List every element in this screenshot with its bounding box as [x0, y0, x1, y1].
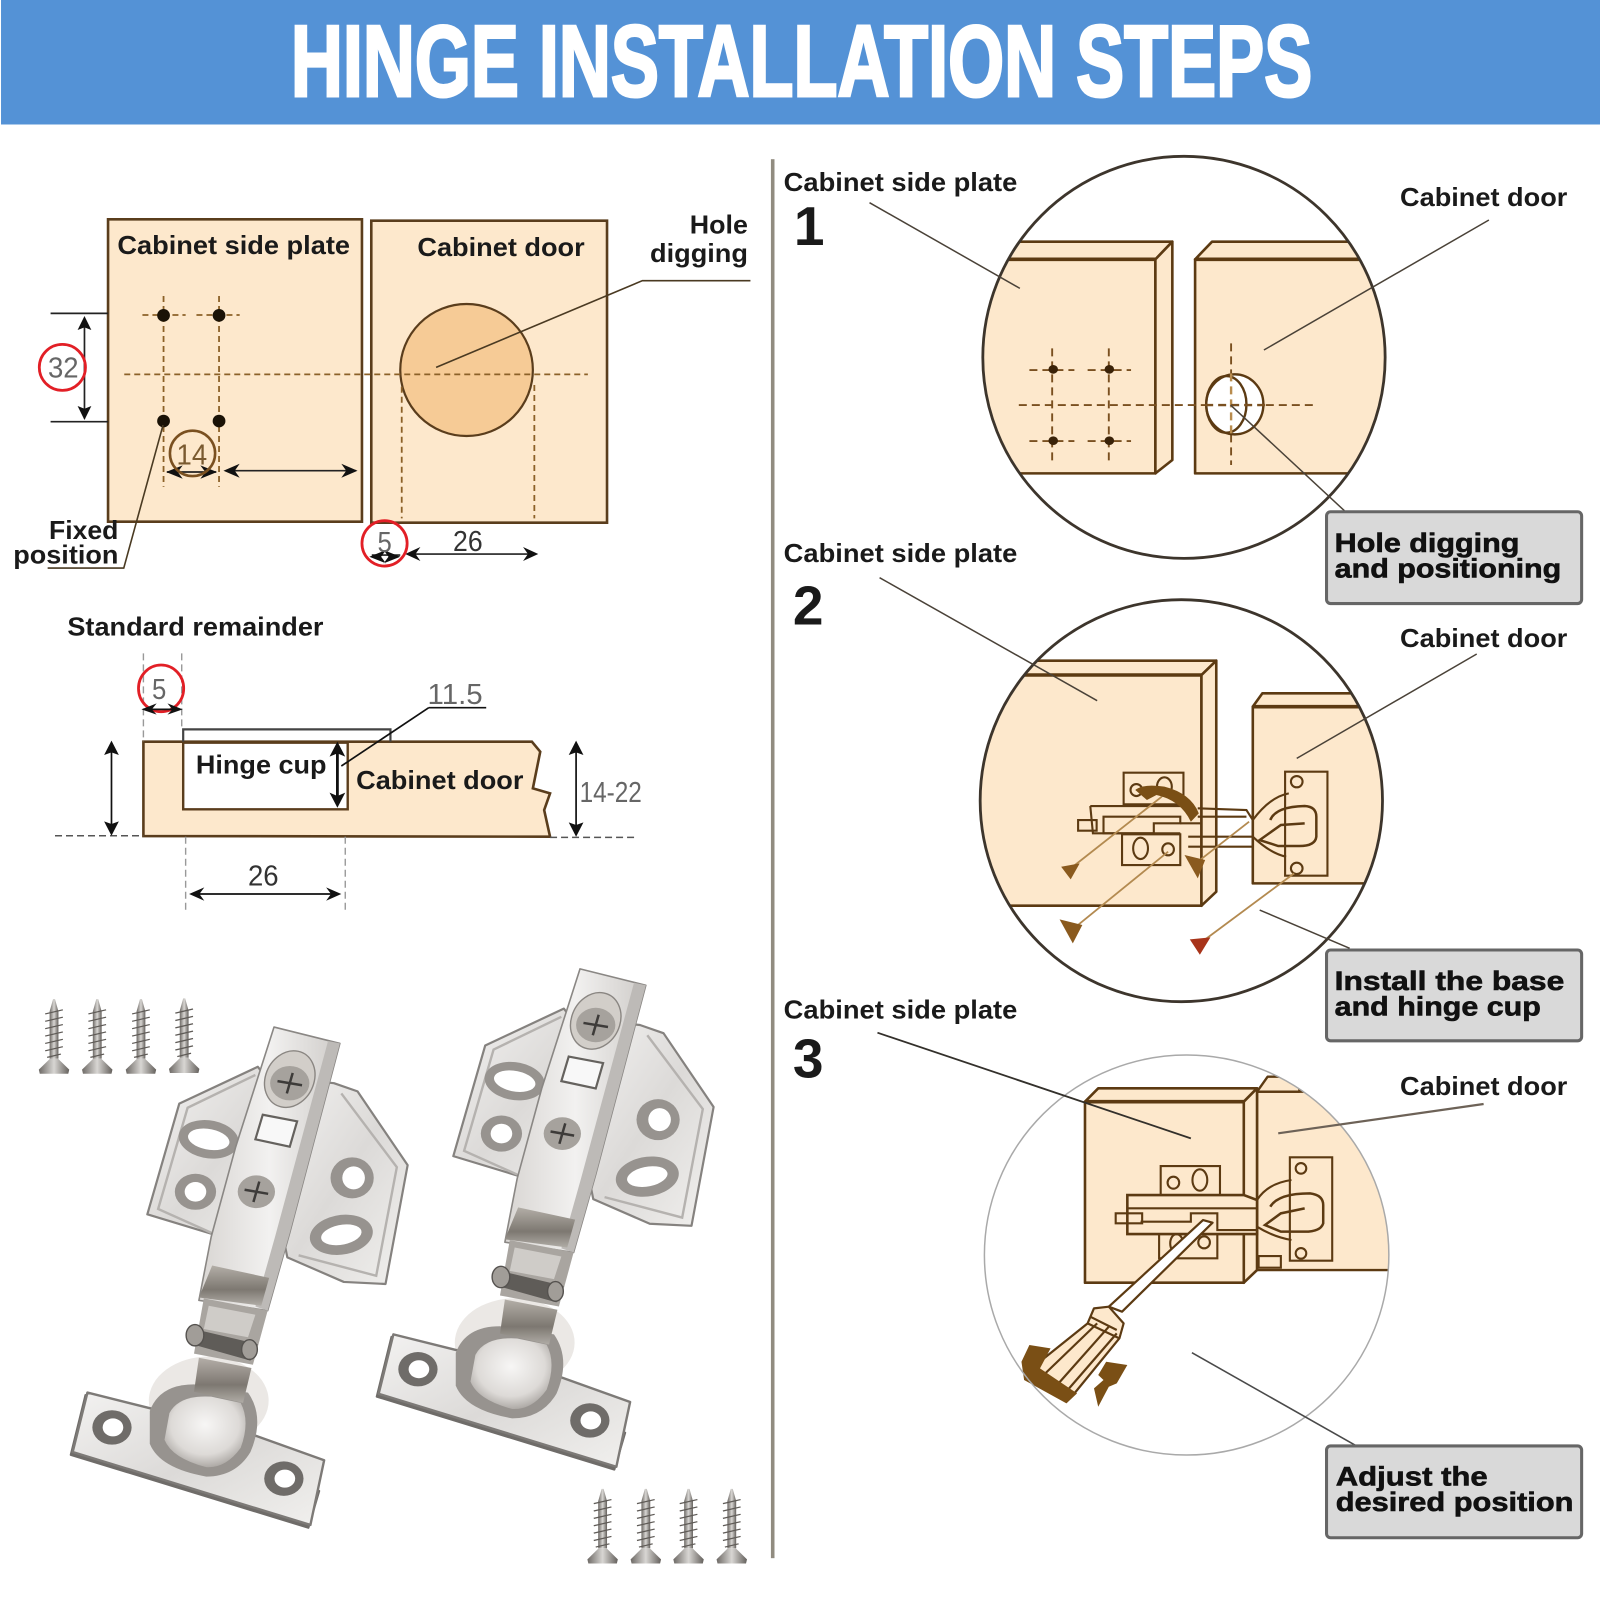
leader lines	[877, 1033, 1484, 1445]
knuckle	[186, 1298, 268, 1365]
cup	[150, 1384, 257, 1477]
step 3 illustration	[1085, 1077, 1405, 1283]
base holes	[92, 1410, 304, 1496]
label: cabinet side plate: Cabinet side plate	[784, 538, 1017, 568]
top screw	[258, 1046, 322, 1112]
cup disc	[149, 1357, 269, 1445]
door hole	[1205, 373, 1265, 435]
step 2 illustration	[971, 661, 1405, 906]
callout: adjust the desired position: Adjust the	[1336, 1462, 1488, 1492]
callout: install the base and hinge cup: and hinge cup	[1335, 991, 1541, 1021]
label: fixed position: Fixed	[49, 515, 118, 545]
label: hole digging: Hole	[690, 210, 748, 240]
circle outline	[984, 1055, 1389, 1455]
label: cabinet door: Cabinet door	[356, 765, 523, 795]
step 1 illustration	[971, 242, 1405, 473]
cabinet side plate board	[108, 219, 362, 522]
brown motion arrows	[1021, 1345, 1127, 1407]
step number 3: 3	[793, 1028, 823, 1090]
hinge drawing	[1116, 1157, 1332, 1268]
red circle 32	[39, 344, 85, 390]
label: hole digging	[650, 210, 748, 268]
dimensions	[152, 674, 642, 893]
dimensions: 5	[378, 527, 392, 559]
arm screw	[238, 1175, 275, 1208]
circle outline	[980, 600, 1383, 1002]
wing holes	[174, 1115, 378, 1260]
label: cabinet side plate: Cabinet side plate	[784, 994, 1017, 1024]
red circle 5	[138, 665, 184, 712]
panel: step 2	[784, 538, 1582, 1041]
circle 14	[170, 431, 215, 476]
label: standard remainder: Standard remainder	[67, 612, 323, 642]
callout: hole digging and positioning: Hole digging	[1335, 528, 1519, 558]
dimensions: 14-22	[580, 777, 642, 809]
callout: adjust the desired position	[1327, 1446, 1582, 1538]
curved arrow	[1135, 786, 1199, 822]
screwdriver	[1029, 1220, 1213, 1393]
label: cabinet door: Cabinet door	[1400, 182, 1567, 212]
label: hinge cup: Hinge cup	[196, 749, 327, 779]
neck	[194, 1358, 251, 1403]
left wing	[147, 1067, 295, 1247]
divider	[771, 159, 774, 1558]
callout: install the base and hinge cup: Install the base	[1335, 966, 1564, 996]
header banner	[1, 0, 1600, 124]
label: cabinet side plate: Cabinet side plate	[117, 230, 350, 260]
base plate	[73, 1393, 324, 1525]
hinge right	[377, 969, 714, 1470]
hinge left	[71, 1027, 408, 1528]
dimensions: 14	[177, 439, 207, 471]
arm	[199, 1027, 340, 1311]
callout: hole digging and positioning	[1327, 512, 1582, 604]
circle outline	[983, 156, 1385, 558]
step number 2: 2	[793, 574, 823, 636]
hole circle	[400, 304, 533, 436]
label: cabinet door: Cabinet door	[1400, 623, 1567, 653]
dimensions: 26	[248, 861, 279, 893]
screws bottom right	[587, 1489, 747, 1563]
panel: hole layout diagram	[13, 210, 750, 569]
door cross-section	[143, 742, 550, 837]
leader lines	[880, 578, 1477, 948]
dimensions: 26	[453, 526, 483, 558]
right wing	[275, 1081, 408, 1284]
red circle 5	[362, 521, 407, 566]
label: hole digging: digging	[650, 238, 748, 268]
dimensions	[48, 353, 483, 559]
label: cabinet side plate: Cabinet side plate	[784, 167, 1017, 197]
screws	[1071, 797, 1294, 943]
callout: adjust the desired position: desired position	[1336, 1487, 1573, 1517]
cabinet door board	[371, 221, 607, 523]
label: cabinet door: Cabinet door	[1400, 1071, 1567, 1101]
label: cabinet door: Cabinet door	[417, 232, 585, 262]
label: fixed position: position	[13, 539, 118, 569]
step number 1: 1	[794, 195, 824, 257]
screws top left	[39, 998, 199, 1074]
label: fixed position	[13, 515, 118, 569]
base plate shadow edge	[71, 1395, 319, 1528]
hinge drawing	[1078, 772, 1327, 876]
square window	[255, 1115, 297, 1147]
panel: step 1	[784, 156, 1582, 604]
callout: install the base and hinge cup	[1327, 950, 1582, 1041]
dimensions: 5	[152, 674, 166, 706]
panel: product photo hinges and screws	[39, 969, 747, 1563]
hinge cup recess	[183, 743, 348, 809]
panel: standard remainder section	[55, 612, 642, 913]
dimensions: 32	[48, 353, 79, 385]
dimensions: 11.5	[428, 679, 483, 711]
panel: step 3	[784, 994, 1582, 1538]
leader lines	[870, 203, 1489, 511]
leader lines	[48, 281, 750, 568]
callout: hole digging and positioning: and positioning	[1335, 554, 1561, 584]
